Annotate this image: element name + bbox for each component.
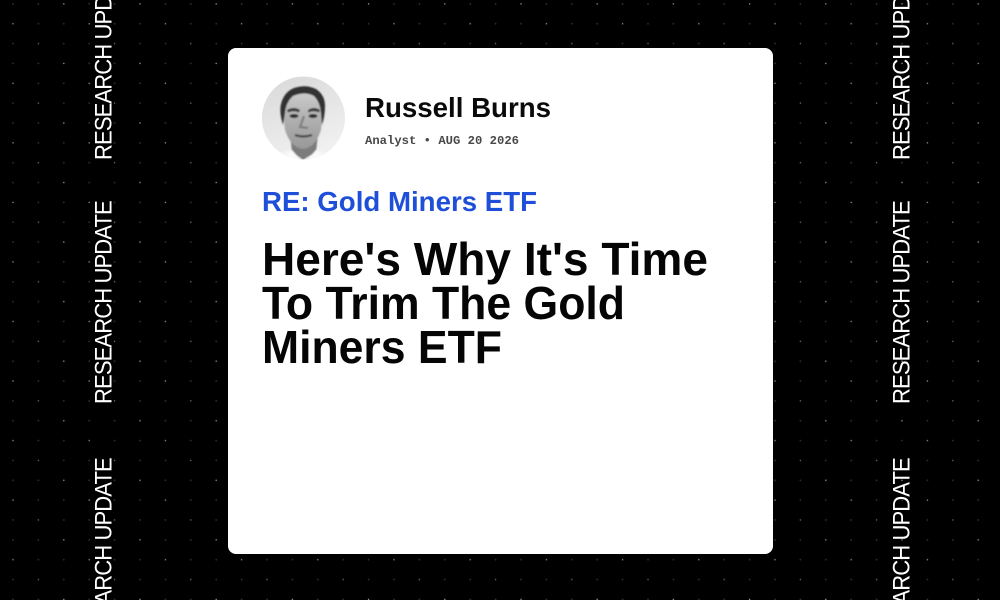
analyst role and date: Analyst • AUG 20 2026 bbox=[365, 134, 519, 148]
left vertical repeating label bbox=[90, 0, 117, 600]
headline: To Trim The Gold bbox=[262, 277, 625, 329]
subject line: RE: Gold Miners ETF bbox=[262, 186, 537, 217]
headline: Miners ETF bbox=[262, 321, 502, 373]
icon: analyst portrait bbox=[262, 76, 345, 162]
right vertical repeating label bbox=[888, 0, 915, 600]
headline: Here's Why It's Time bbox=[262, 233, 708, 285]
left vertical repeating label: RESEARCH UPDATE bbox=[90, 201, 117, 404]
panel: white card bbox=[228, 48, 773, 554]
headline bbox=[262, 233, 708, 373]
right vertical repeating label: RESEARCH UPDATE bbox=[888, 201, 915, 404]
analyst name: Russell Burns bbox=[365, 92, 551, 123]
